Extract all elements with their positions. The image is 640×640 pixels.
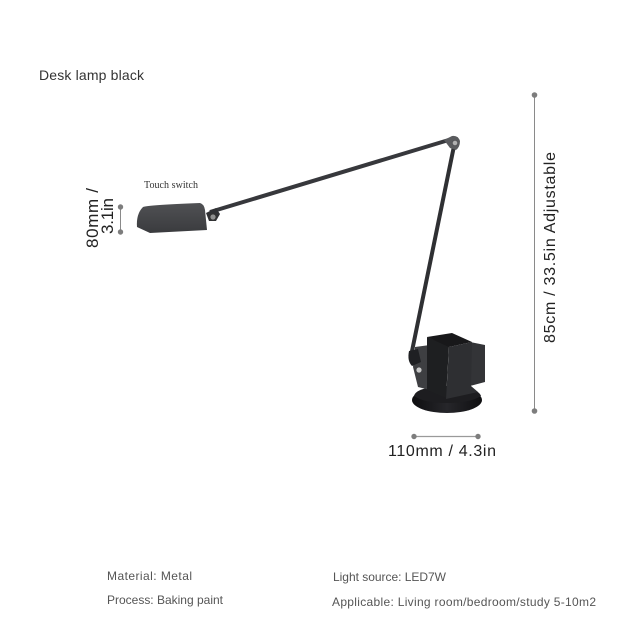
specifications [107, 569, 596, 609]
title: Desk lamp black [39, 67, 145, 83]
elbow joint [444, 136, 460, 150]
lamp head [137, 203, 207, 233]
pivot joint [408, 349, 421, 366]
process: Process: Baking paint [107, 593, 224, 607]
lamp head height marker [118, 204, 123, 235]
lamp upper arm [210, 139, 452, 212]
centre block front face [446, 342, 478, 399]
lamp lower arm [411, 146, 454, 356]
material: Material: Metal [107, 569, 192, 583]
lamp head height label: 80mm / [83, 188, 102, 248]
centre block side face [427, 337, 449, 398]
touch switch label: Touch switch [144, 180, 198, 191]
lamp illustration [137, 136, 485, 413]
centre block top face [427, 333, 472, 347]
light source: Light source: LED7W [333, 570, 447, 584]
base width marker [411, 434, 481, 439]
base width label: 110mm / 4.3in [388, 443, 496, 460]
total height marker [532, 92, 537, 414]
left block [413, 345, 430, 390]
lamp head height label: 3.1in [98, 198, 117, 234]
total height label: 85cm / 33.5in Adjustable [542, 152, 559, 343]
lamp head height label [83, 188, 117, 248]
lamp base body [408, 333, 485, 413]
base disc [412, 387, 482, 413]
applicable: Applicable: Living room/bedroom/study 5-10m2 [332, 595, 596, 609]
right block [470, 342, 485, 386]
head joint [206, 208, 220, 221]
